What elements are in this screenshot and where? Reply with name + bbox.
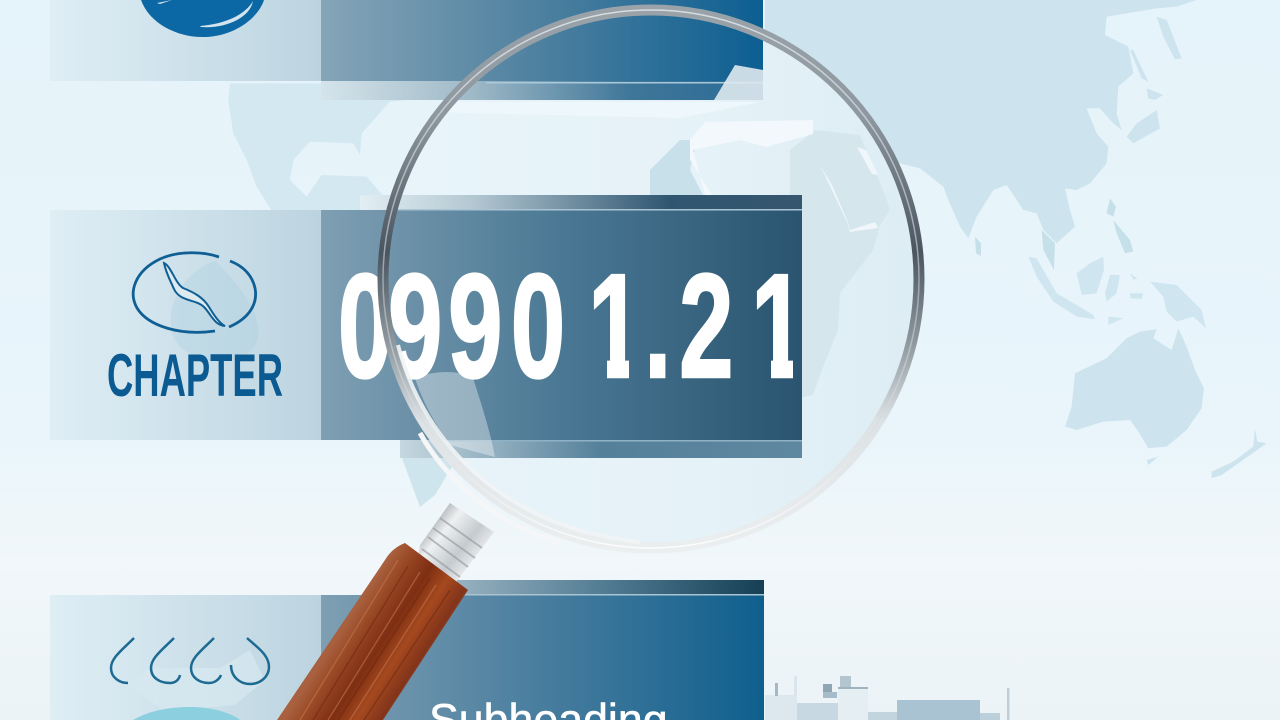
ship silhouette [765,676,1010,720]
panel: bottom row [50,580,764,720]
lens ring [383,10,919,548]
middle right box [321,210,802,440]
panel: middle row [50,195,805,458]
lens map: Africa and Arabia [790,130,890,400]
icon: shadow shapes [128,650,265,712]
bottom right box [321,595,764,720]
bottom top strip [420,580,764,595]
handle neck [418,503,494,590]
world map [228,0,1267,507]
icon: four water drops [111,638,269,684]
bottom left box [50,595,321,720]
lens map: white landmass [690,120,813,195]
icon: oval with wave [133,253,258,361]
top strip [321,81,763,100]
lens map: blue wedge [650,140,703,195]
icon: teal dome [133,707,240,720]
label: CHAPTER: CHAPTER [107,342,283,409]
map: South America [402,440,470,507]
magnifying glass [277,10,919,720]
map: Australia and New Zealand [1065,328,1267,478]
icon: filled blue drop [141,0,264,37]
top left box [50,0,321,81]
top strip of middle box [360,195,802,210]
map: North America [228,83,440,213]
bottom strip of middle box [400,440,802,458]
wooden handle [277,543,468,720]
lens interior view [457,42,914,542]
chapter number: 09901.21 [338,242,805,409]
panel: top row [50,0,763,100]
glass reflection [415,372,495,457]
map: Asia [765,0,1206,328]
top right box [321,0,763,81]
middle left box [50,210,321,440]
